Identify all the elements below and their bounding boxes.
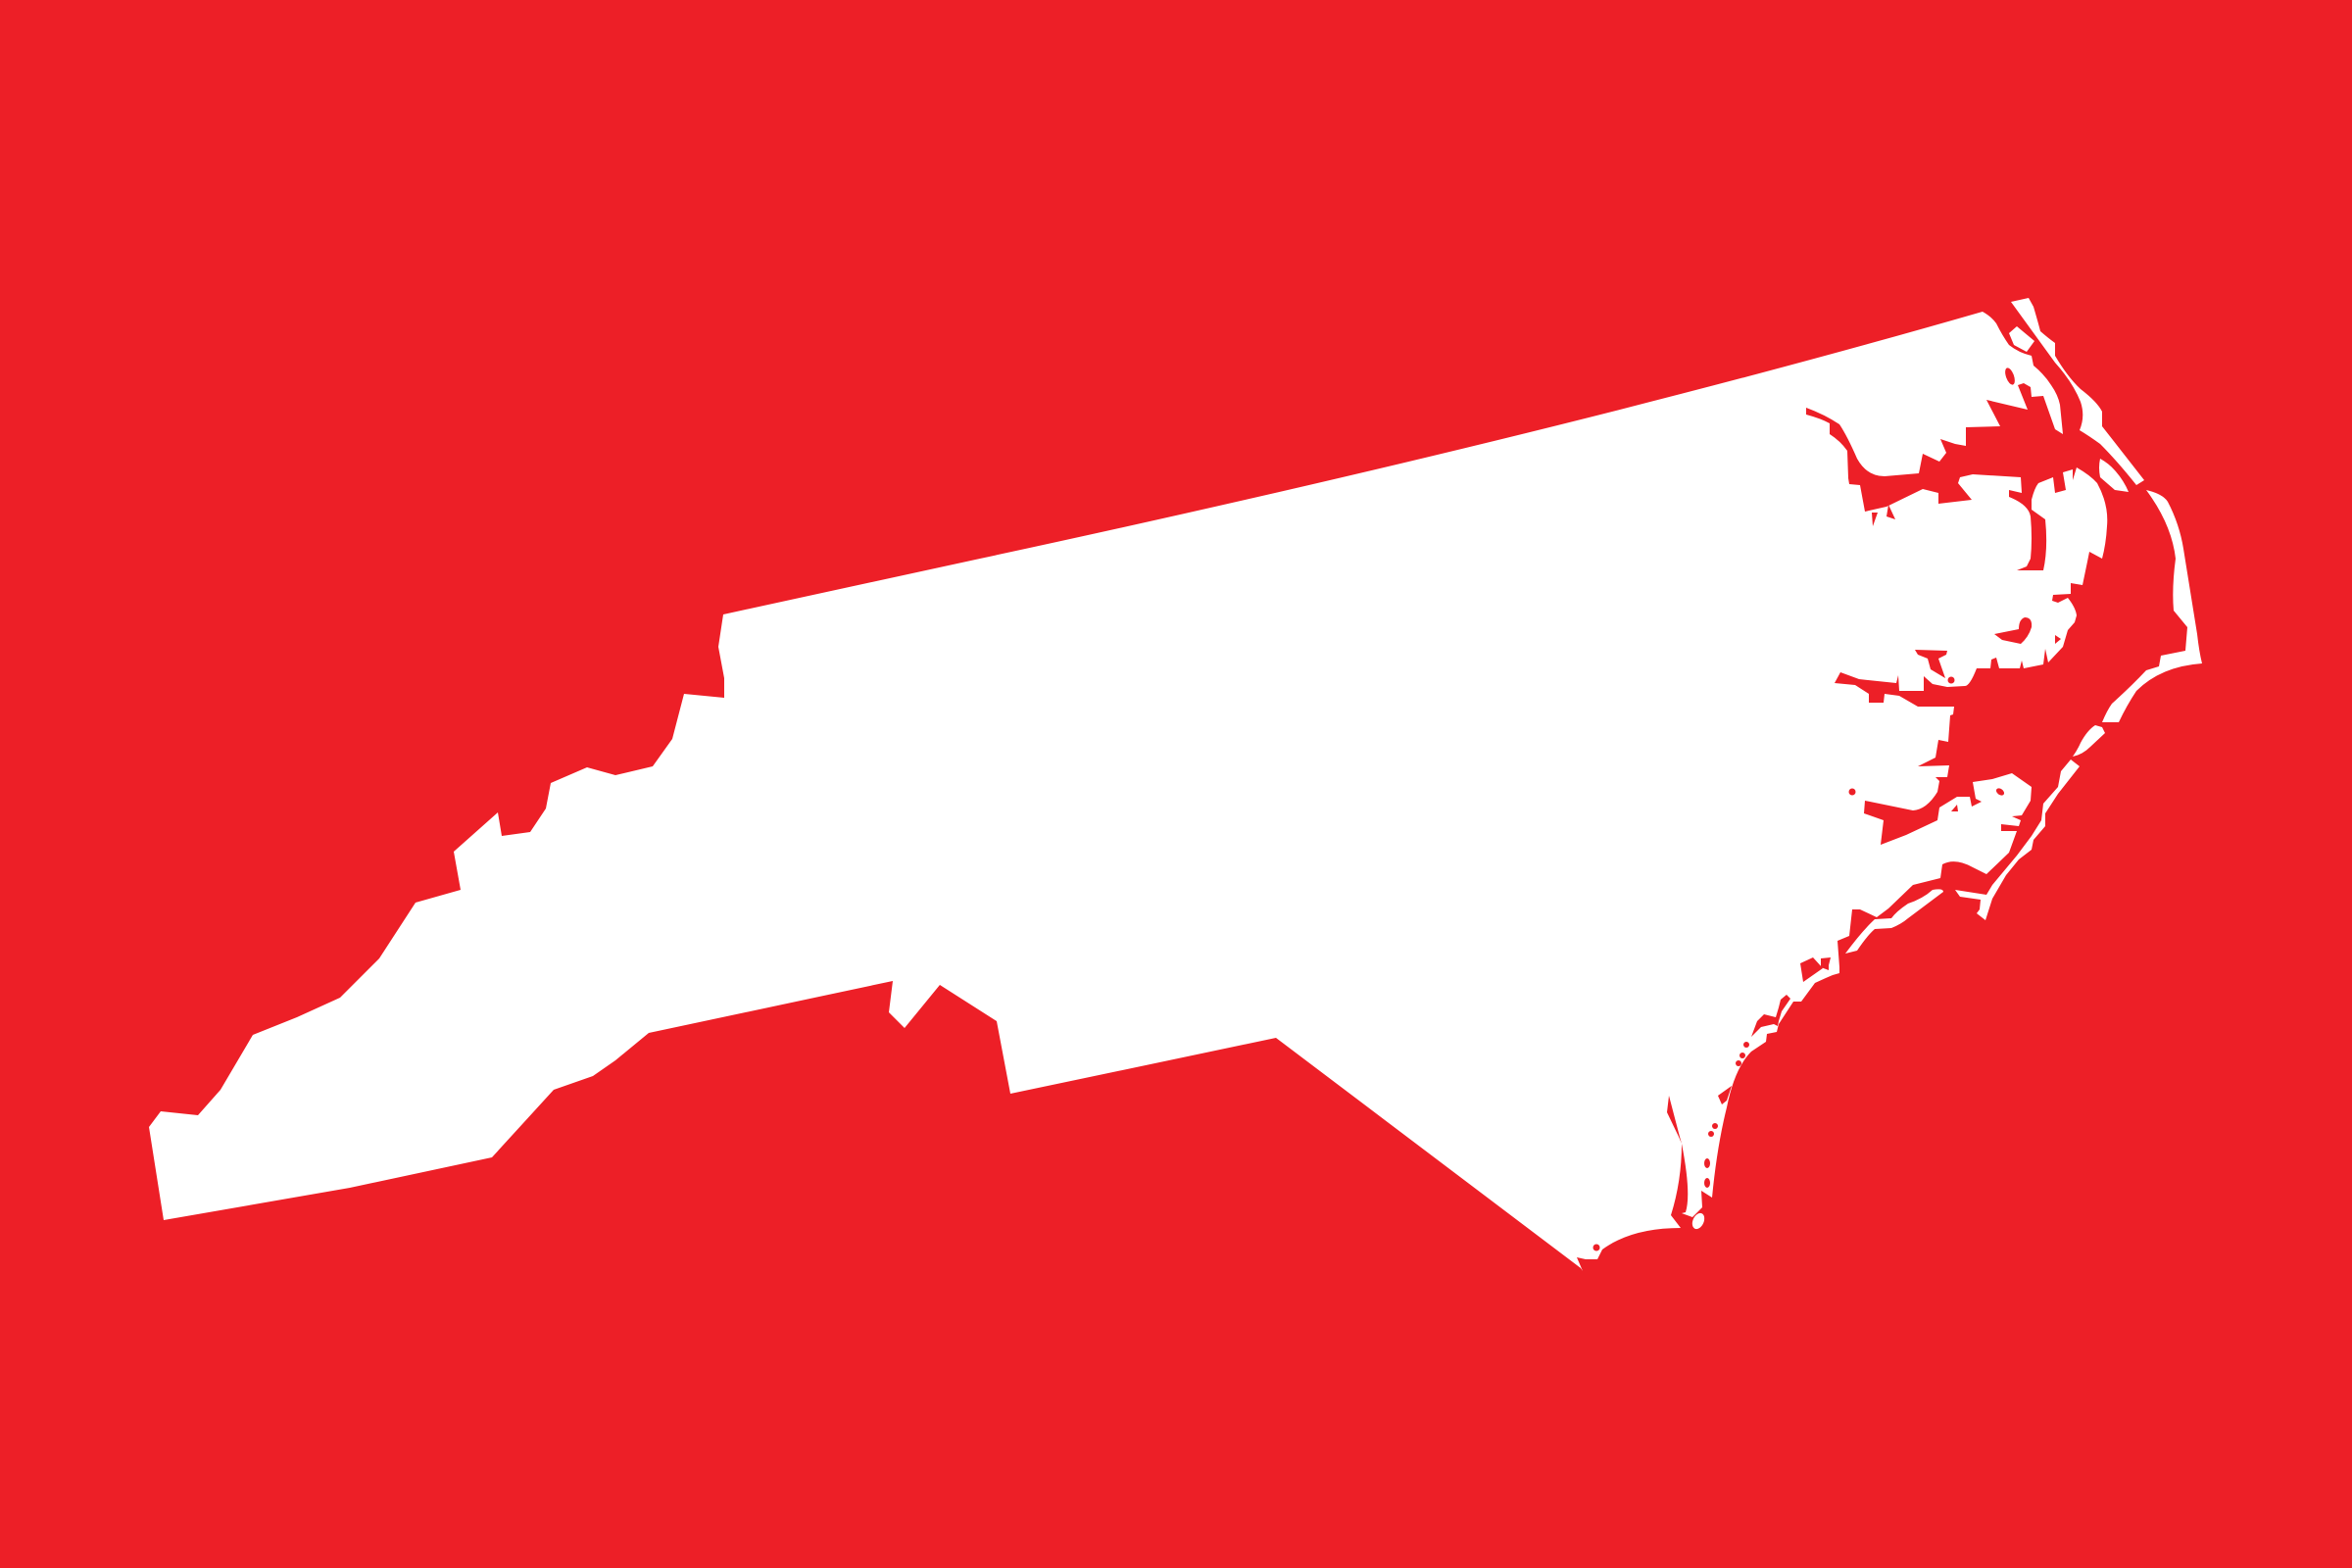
outer banks: Hatteras island: [2102, 490, 2202, 722]
state mainland: [149, 312, 2107, 1271]
island: Currituck marsh: [2009, 326, 2034, 352]
island: Roanoke: [2099, 459, 2129, 492]
island: Bald Head: [1690, 1211, 1707, 1231]
outer banks: Core Banks: [1955, 760, 2080, 920]
outer banks: northern barrier island: [2011, 298, 2144, 485]
outer banks: Ocracoke island: [2073, 725, 2105, 757]
water details: inlets, lakes and rivers: [1593, 367, 2061, 1250]
outer banks: Bogue Banks: [1845, 889, 1943, 954]
